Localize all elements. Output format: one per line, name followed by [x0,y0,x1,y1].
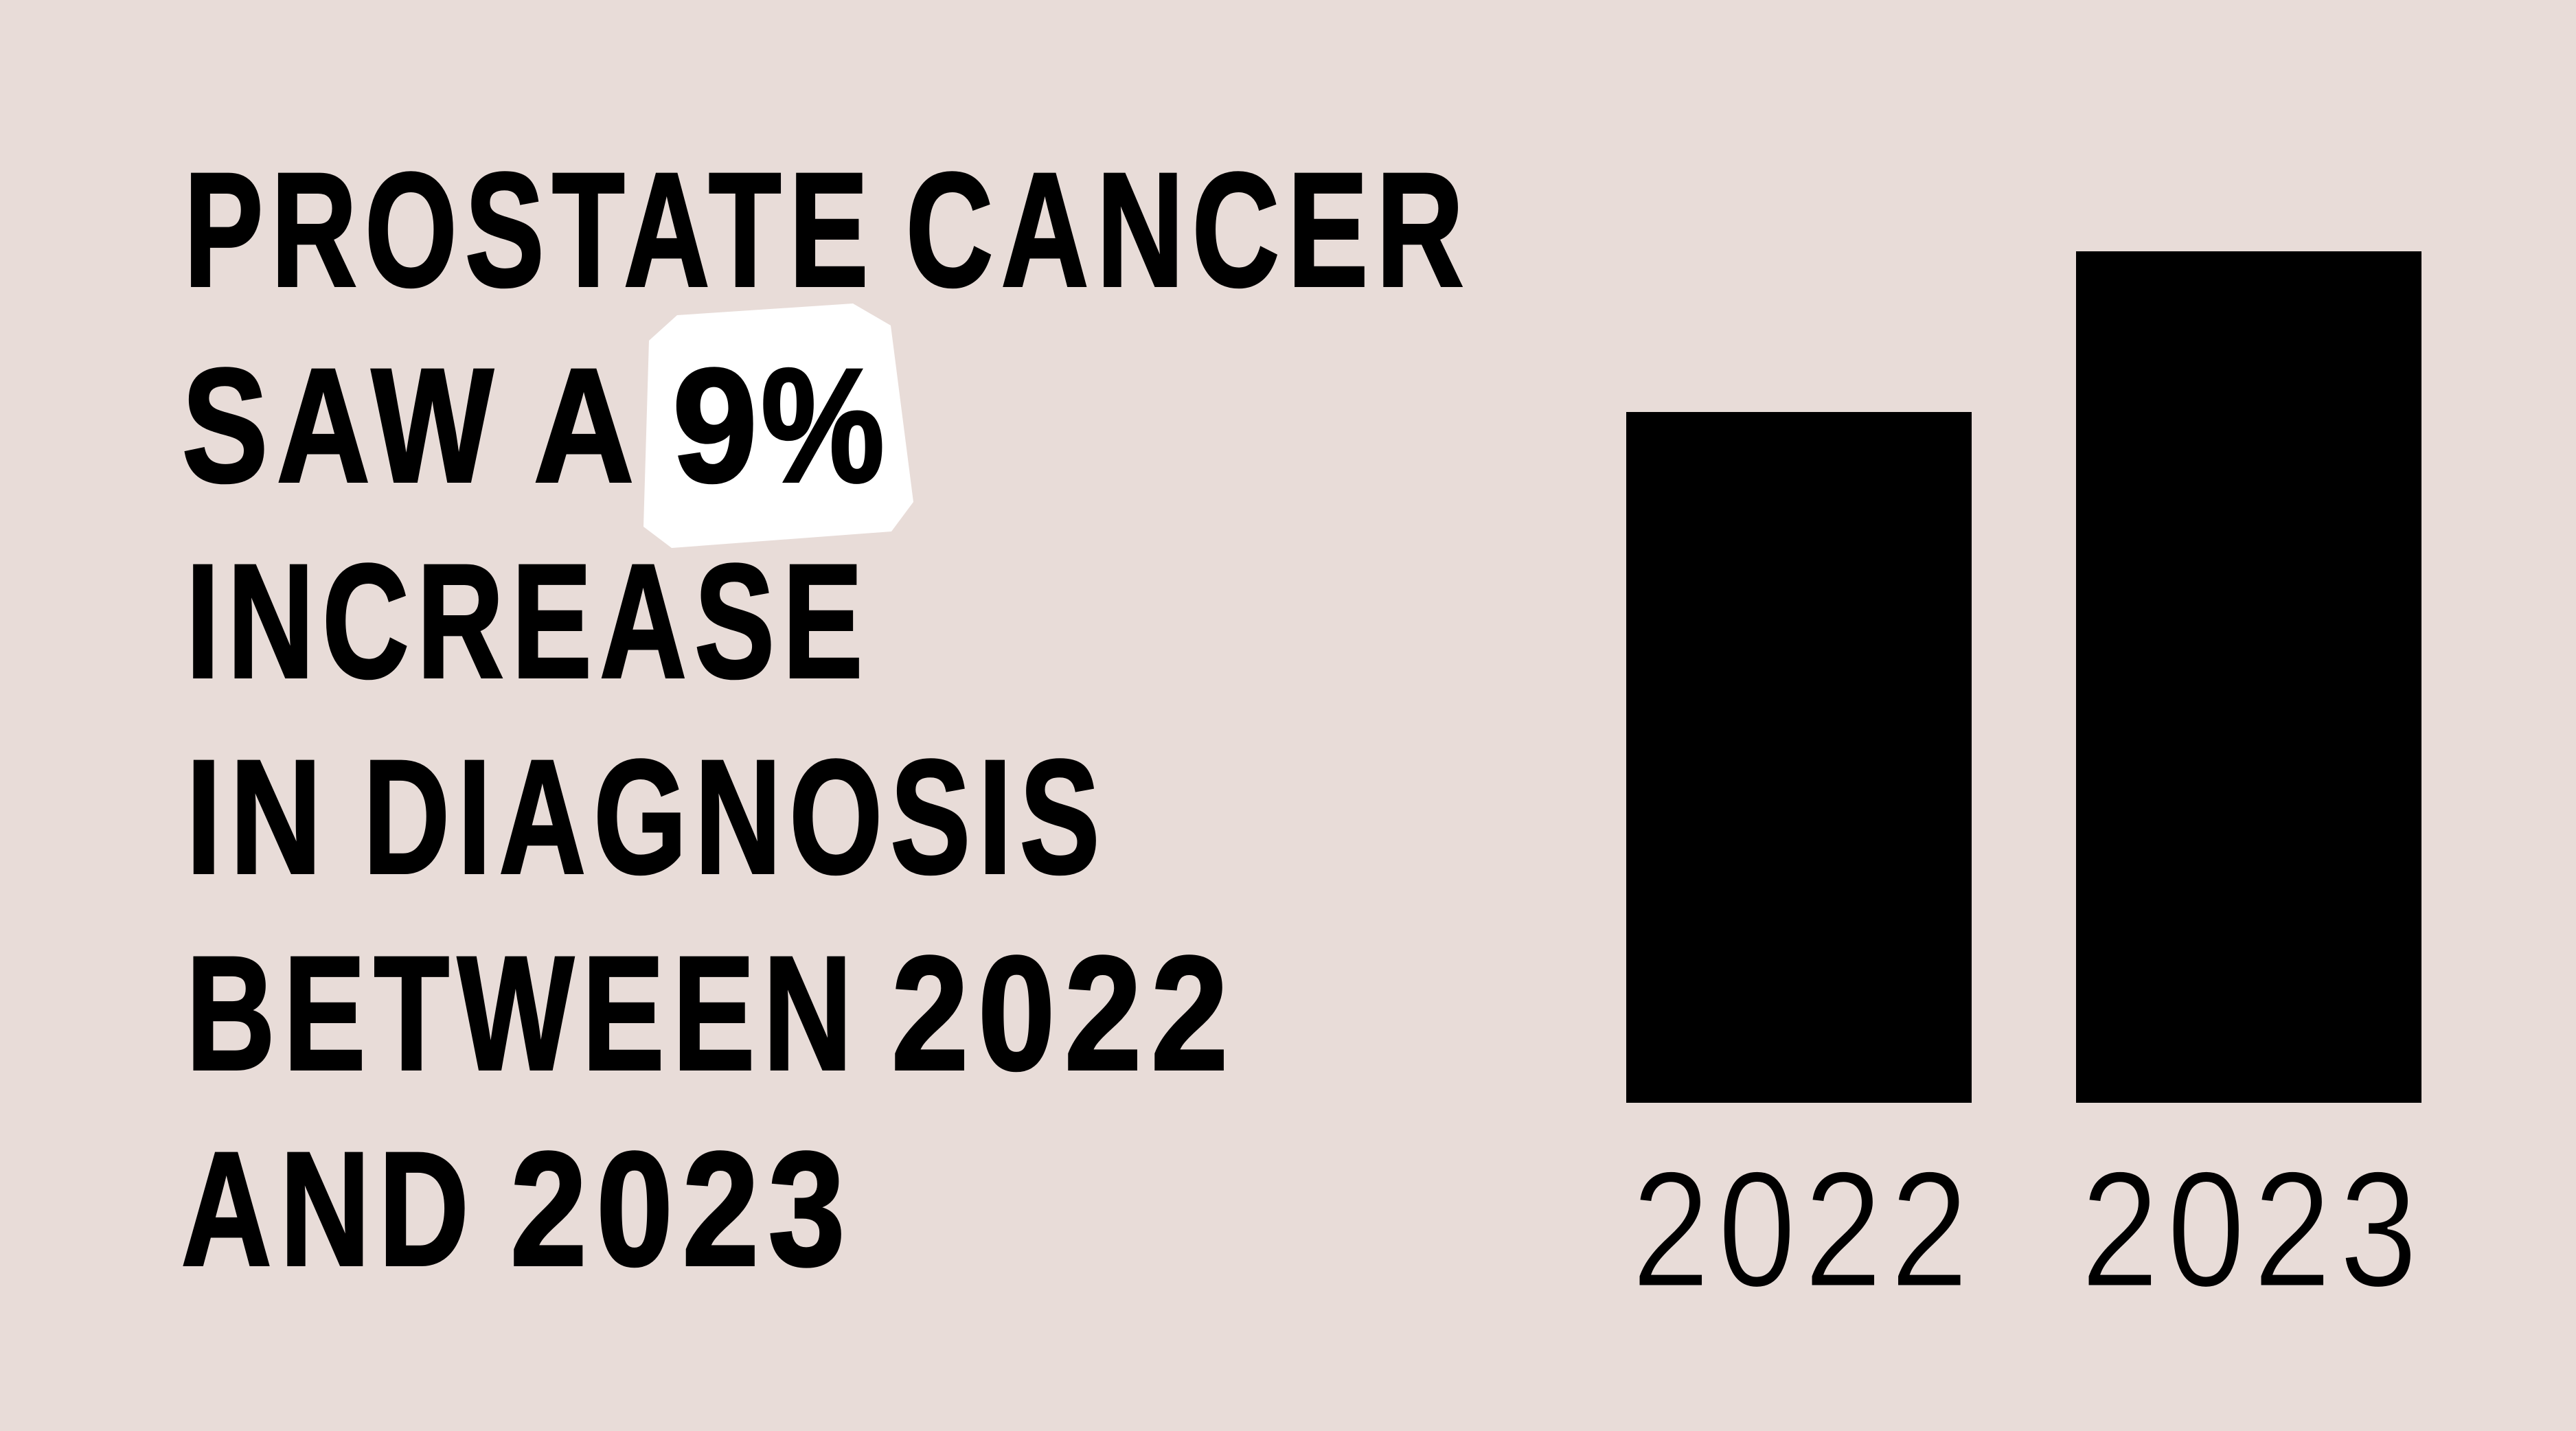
heading line 1: PROSTATE [184,139,876,321]
heading line 6: AND [181,1119,477,1300]
heading line 1: CANCER [906,139,1472,321]
heading line 4: DIAGNOSIS [363,726,1108,908]
heading line 2: SAW [182,335,502,516]
bar chart: 2022 vs 2023 [1626,251,2426,1321]
heading line 5: BETWEEN [186,923,860,1104]
bar: 2023 [2076,251,2421,1103]
heading line 4 [186,726,1108,908]
heading line 2 [182,335,885,516]
heading line 2: % [761,335,885,516]
heading line 2: A [534,335,634,516]
callout: white highlight shape behind 9% [643,304,913,548]
heading line 6: 2023 [510,1119,854,1300]
heading line 4: IN [186,726,330,908]
heading line 5: 2022 [891,923,1238,1104]
axis label: 2022: 2022 [1632,1137,1976,1321]
heading line 2: 9 [672,335,757,516]
axis label: 2023: 2023 [2081,1137,2426,1321]
heading line 3: INCREASE [186,531,871,712]
title: prostate cancer headline [181,139,1472,1300]
heading line 6 [181,1119,854,1300]
bar: 2022 [1626,412,1972,1103]
